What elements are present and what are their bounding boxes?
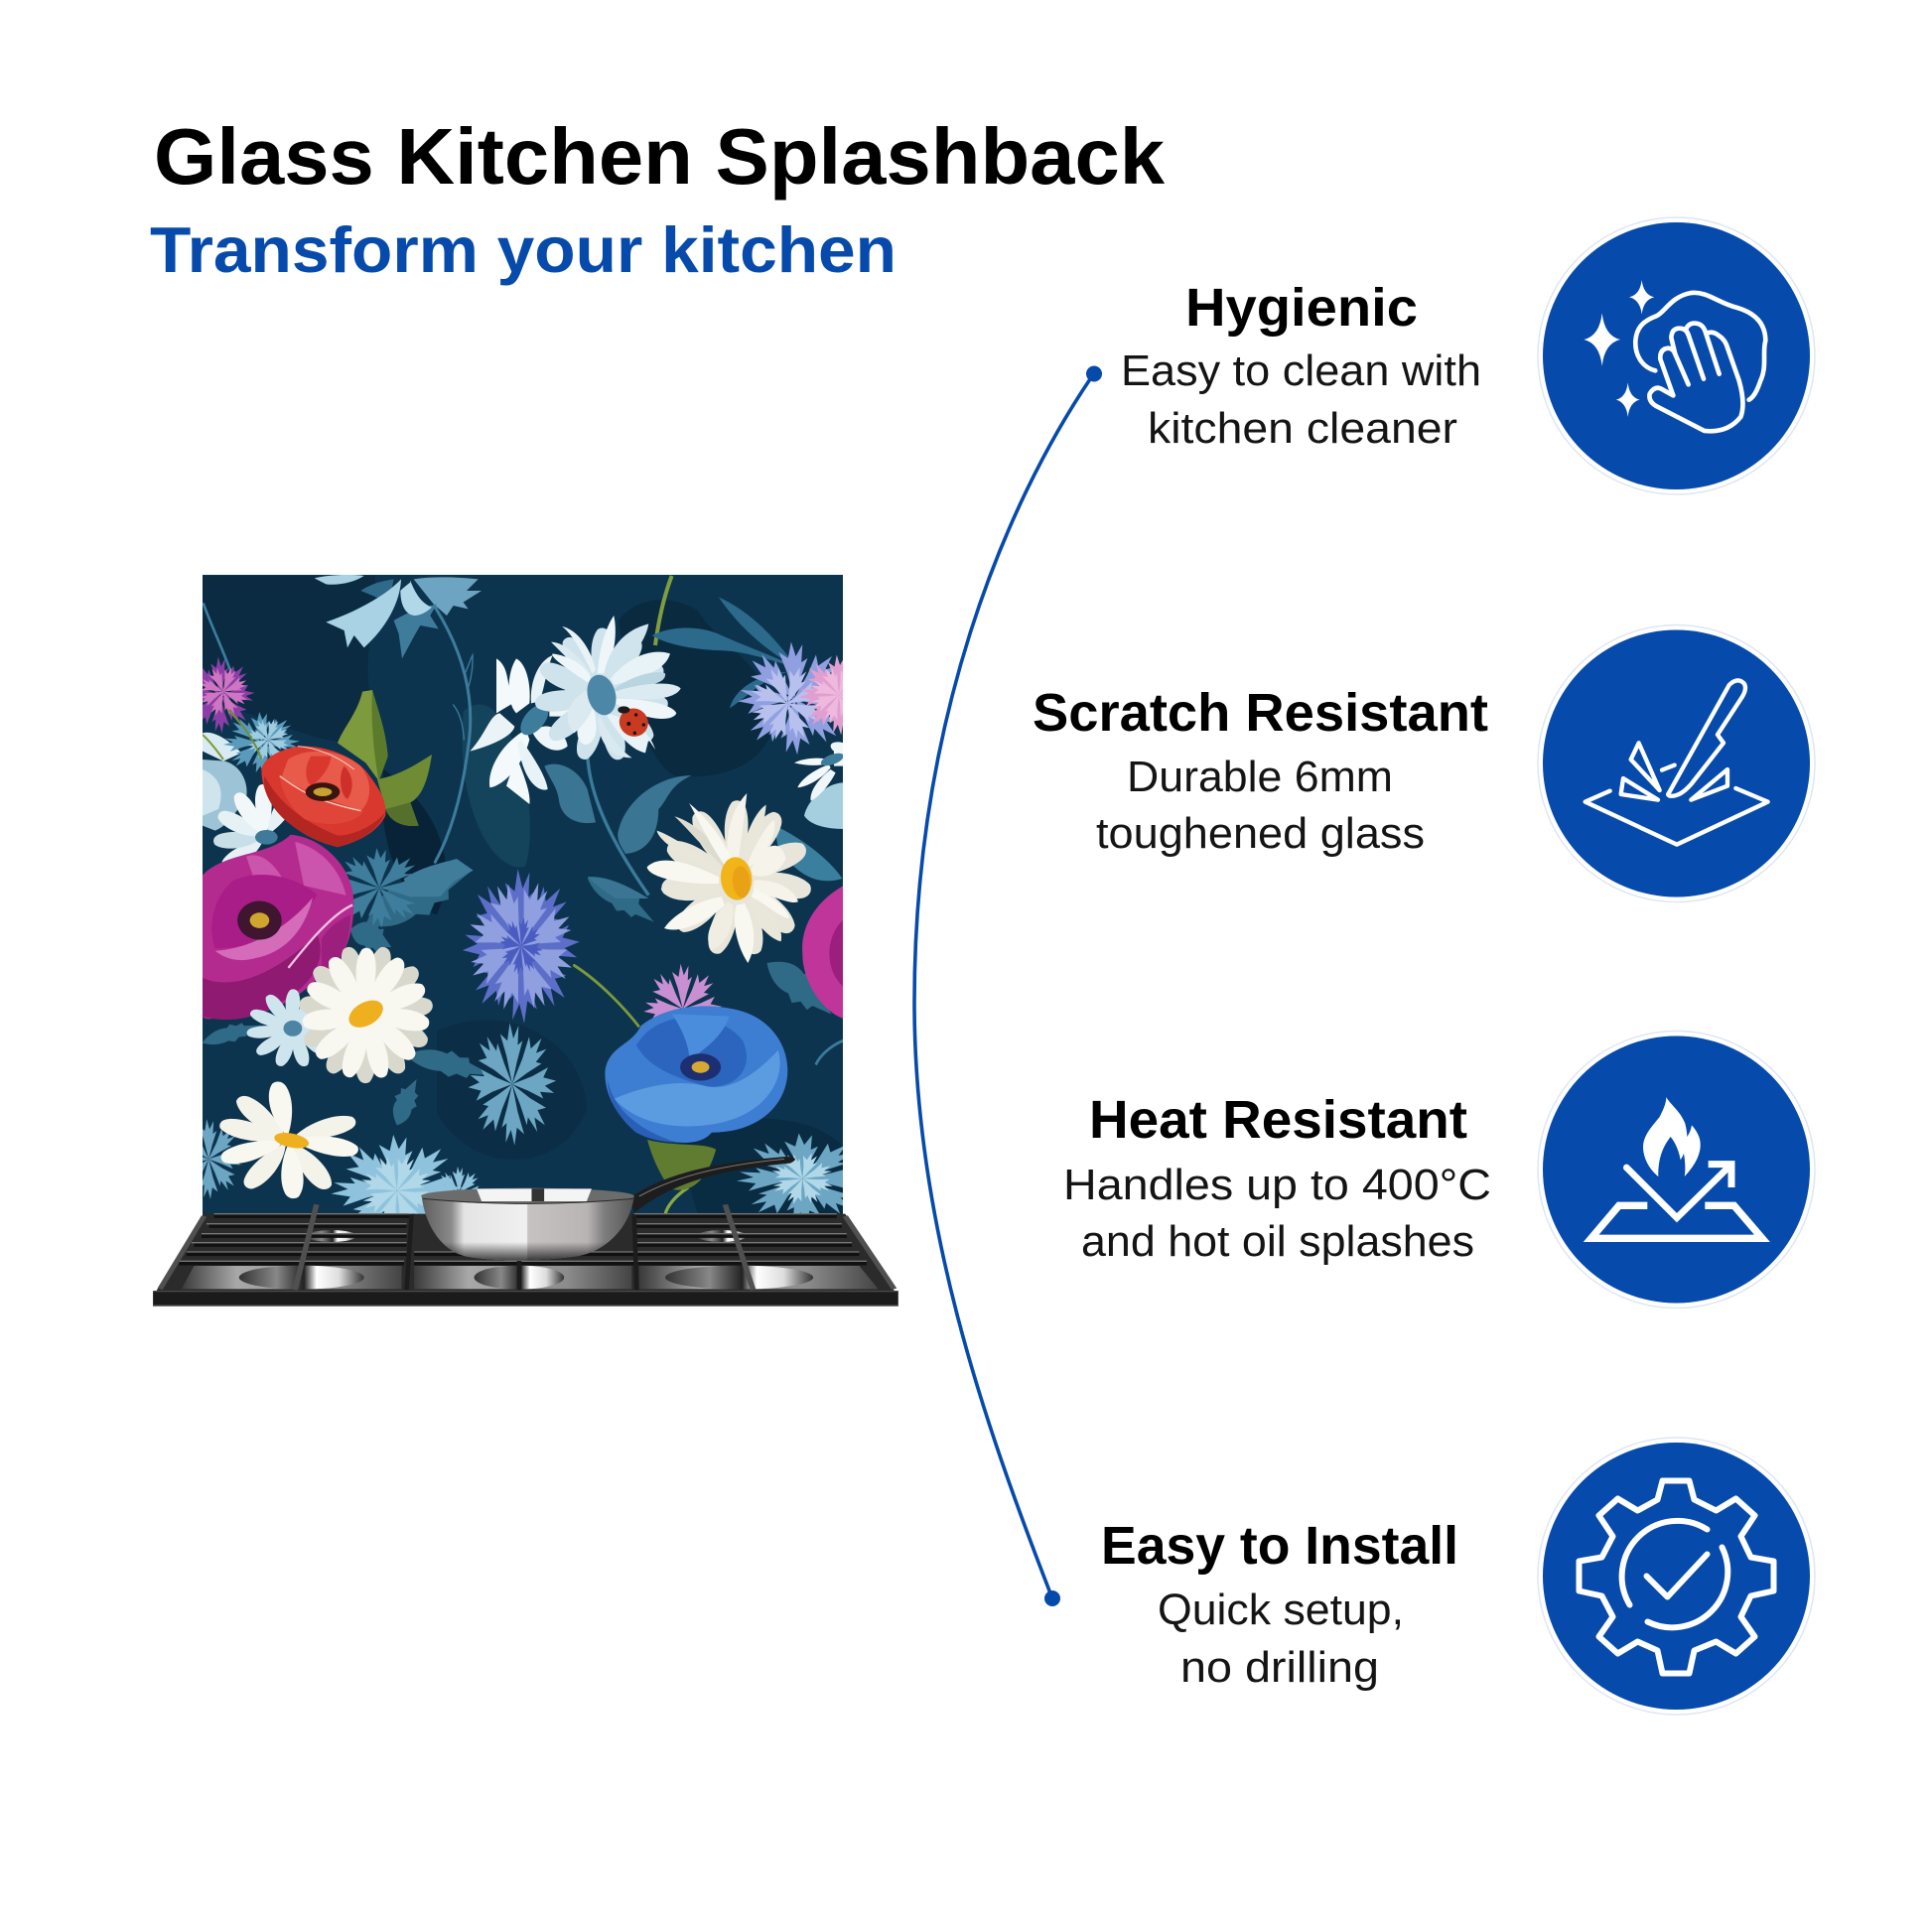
white daisy with yellow centre <box>647 793 812 963</box>
burners <box>239 1230 813 1290</box>
cooktop with frying pan <box>153 1157 898 1307</box>
description: Durable 6mm <box>1127 753 1393 801</box>
feature: Scratch Resistant <box>1033 683 1488 858</box>
description: Quick setup, <box>1158 1586 1404 1634</box>
connector curve <box>914 365 1102 1606</box>
dark teal leaves <box>652 598 796 708</box>
ladybug <box>618 706 648 737</box>
magenta poppy <box>202 835 353 1020</box>
pale side poppy <box>203 733 247 831</box>
steel trays <box>182 1266 879 1289</box>
green stem <box>655 576 672 645</box>
top-right cornflowers <box>738 641 843 755</box>
panel: floral glass splashback <box>203 575 843 1216</box>
right magenta poppy <box>802 886 844 1019</box>
description: toughened glass <box>1096 809 1425 858</box>
icon: flame over glass <box>1538 1031 1815 1309</box>
background and lower-back foliage <box>175 576 869 1247</box>
feature: Heat Resistant <box>1063 1090 1491 1266</box>
feature: Hygienic <box>1121 278 1481 453</box>
lower flowers <box>202 835 844 1199</box>
description: Handles up to 400°C <box>1063 1161 1491 1209</box>
icon: knife on glass <box>1538 625 1815 901</box>
description: Easy to clean with <box>1121 346 1481 395</box>
pale blue daisy <box>246 989 318 1066</box>
main blue-white daisy <box>534 616 681 762</box>
teal leaf <box>404 859 474 897</box>
red poppy <box>261 746 385 847</box>
upper-right flowers: daisies, ladybug, cornflowers <box>470 576 879 963</box>
white daisy bottom-left <box>216 1080 360 1199</box>
title: Glass Kitchen Splashback <box>154 112 1166 201</box>
blue poppy <box>605 1006 787 1143</box>
feature: Easy to Install <box>1101 1516 1458 1692</box>
heading: Easy to Install <box>1101 1516 1458 1576</box>
right pale flower <box>794 742 845 829</box>
description: no drilling <box>1180 1643 1379 1692</box>
grates <box>179 1216 867 1264</box>
description <box>1063 1161 1491 1266</box>
teal cornflower <box>223 712 300 773</box>
hob surface <box>157 1214 895 1291</box>
heading: Heat Resistant <box>1089 1090 1467 1150</box>
pan rim <box>421 1188 634 1204</box>
icon: gear with check <box>1538 1438 1815 1715</box>
daisy under poppy <box>213 784 285 862</box>
description: kitchen cleaner <box>1148 404 1457 453</box>
description: and hot oil splashes <box>1081 1217 1474 1266</box>
stems <box>204 604 473 862</box>
pan handle <box>629 1157 795 1213</box>
heading: Scratch Resistant <box>1033 683 1488 743</box>
description <box>1121 346 1481 453</box>
front bar <box>153 1292 898 1307</box>
description <box>1096 753 1425 858</box>
daisy stem and leaves <box>544 743 842 898</box>
second blue-white daisy <box>470 655 574 804</box>
upper-left flowers: bell flower, poppy and leaves <box>186 575 482 897</box>
subtitle: Transform your kitchen <box>150 213 897 286</box>
teal bell flower <box>315 575 482 658</box>
dark shadow <box>619 600 775 776</box>
description <box>1158 1586 1404 1692</box>
product illustration: splashback on cooktop <box>153 575 898 1307</box>
cornflower blue <box>463 869 580 1023</box>
pan body <box>422 1195 634 1260</box>
green leaves <box>338 690 432 826</box>
heading: Hygienic <box>1185 278 1418 338</box>
purple cornflower <box>203 657 254 733</box>
white daisy lower-left centre <box>300 947 433 1084</box>
pink cornflower tips <box>643 963 722 1019</box>
icon: hand wiping <box>1538 217 1815 494</box>
